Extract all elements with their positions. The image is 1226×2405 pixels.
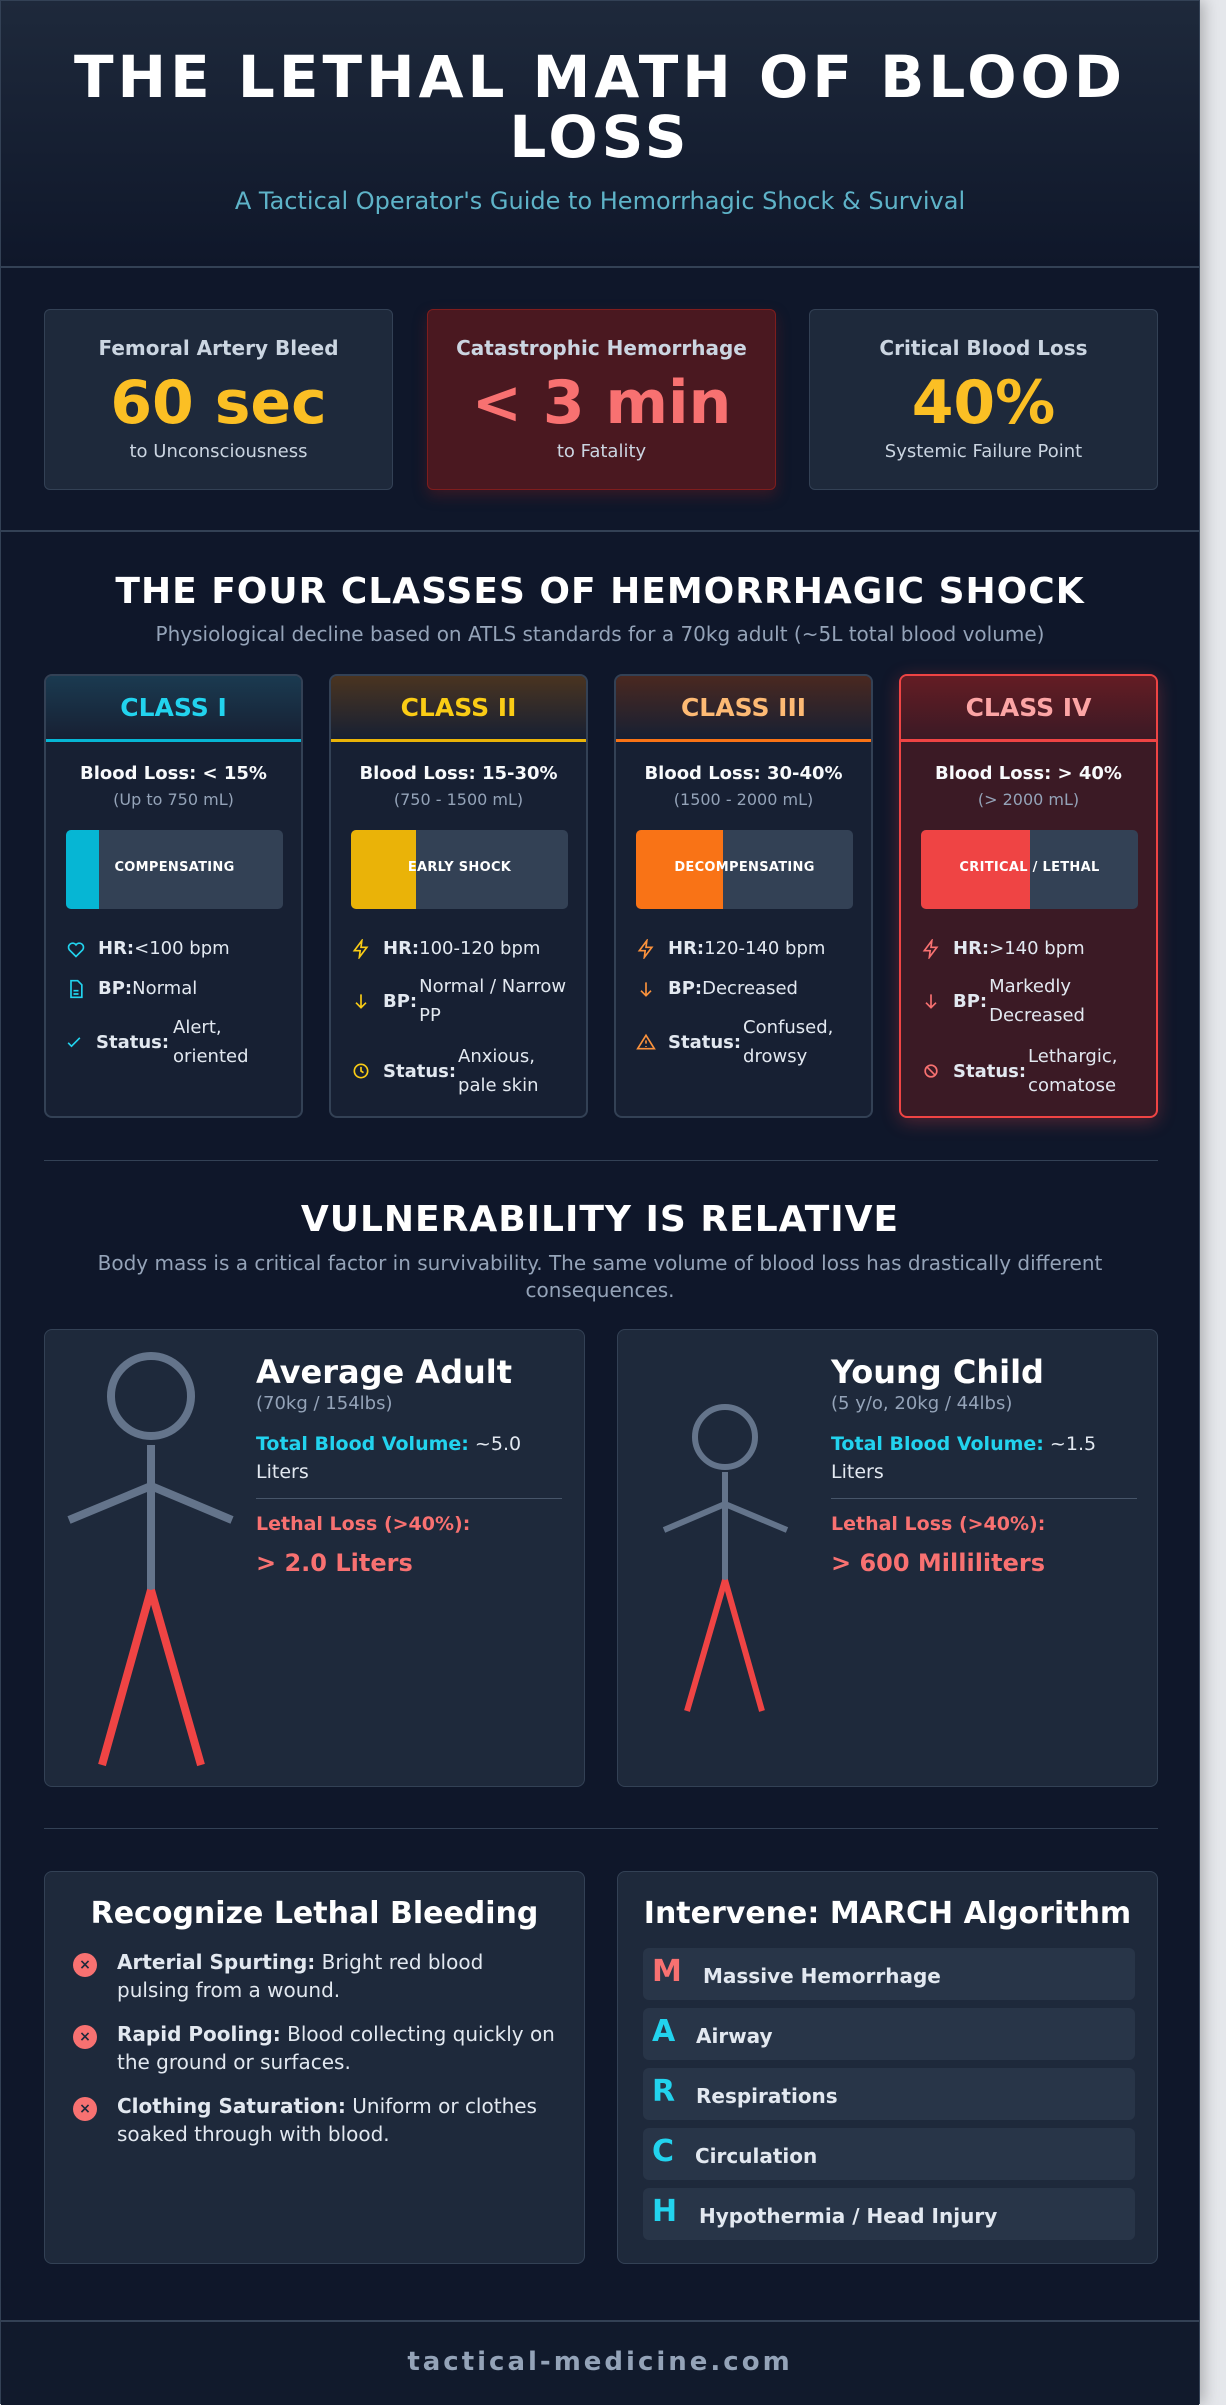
class IV card: Markedly: [989, 976, 1071, 997]
class IV card: Decreased: [989, 1005, 1085, 1026]
class IV card: (> 2000 mL): [978, 790, 1079, 809]
M: Massive Hemorrhage: [703, 1964, 941, 1988]
stat: critical: Critical Blood Loss: [879, 336, 1088, 360]
class I card: oriented: [173, 1046, 249, 1067]
class I card: COMPENSATING: [114, 860, 235, 875]
subtitle: A Tactical Operator's Guide to Hemorrhagic Shock & Survival: [235, 187, 965, 215]
section title: vulnerability: VULNERABILITY IS RELATIVE: [301, 1199, 899, 1240]
item: saturation: ×: [79, 2101, 91, 2117]
class II card: HR:: [383, 938, 419, 959]
class II card: Blood Loss: 15-30%: [359, 763, 558, 784]
class I card: CLASS I: [120, 693, 227, 722]
class IV card: CRITICAL / LETHAL: [959, 860, 1100, 875]
title: LOSS: [509, 103, 691, 171]
class III card: (1500 - 2000 mL): [674, 790, 813, 809]
adult text: > 2.0 Liters: [256, 1549, 413, 1577]
class III card: BP:: [668, 978, 702, 999]
class II card: BP:: [383, 990, 417, 1012]
class III card: Blood Loss: 30-40%: [644, 763, 843, 784]
A: [643, 2008, 1135, 2060]
class II card: [329, 674, 588, 1118]
A: A: [652, 2014, 675, 2049]
class I card: HR:: [98, 938, 134, 959]
R: Respirations: [696, 2084, 838, 2108]
title: [74, 43, 1126, 171]
R: R: [652, 2074, 675, 2109]
header: [1, 1, 1199, 268]
stat: femoral: 60 sec: [110, 368, 327, 438]
R: [643, 2068, 1135, 2120]
class I card: Status:: [96, 1032, 169, 1052]
icon: child figure: [662, 1404, 788, 1712]
class IV card: BP:: [953, 990, 987, 1012]
child text: (5 y/o, 20kg / 44lbs): [831, 1393, 1012, 1414]
section subtitle: Physiological decline based on ATLS standards for a 70kg adult (~5L total blood volume): [156, 622, 1044, 646]
item: arterial: Arterial Spurting: Bright red blood pulsing from a wound.: [117, 1950, 483, 2002]
item: pooling: ×: [79, 2029, 91, 2045]
H: Hypothermia / Head Injury: [699, 2204, 997, 2228]
class IV card: Status:: [953, 1060, 1026, 1082]
adult text: Average Adult: [256, 1353, 512, 1391]
adult text: (70kg / 154lbs): [256, 1393, 392, 1414]
adult text: Total Blood Volume: ~5.0 Liters: [256, 1433, 521, 1483]
item: arterial: ×: [79, 1957, 91, 1973]
child text: Young Child: [831, 1353, 1044, 1391]
child text: > 600 Milliliters: [831, 1549, 1045, 1577]
panel: MARCH: [617, 1871, 1158, 2264]
stat: catastrophic: < 3 min: [472, 368, 731, 438]
class IV card: Blood Loss: > 40%: [935, 763, 1122, 784]
MARCH title: Intervene: MARCH Algorithm: [644, 1896, 1131, 1931]
card: child: [617, 1329, 1158, 1787]
stat: critical: [809, 309, 1158, 490]
H: H: [652, 2194, 677, 2229]
vulnerability subtitle: Body mass is a critical factor in survivability. The same volume of blood loss has drastically different consequences.: [98, 1251, 1102, 1302]
class II card: (750 - 1500 mL): [394, 790, 523, 809]
section title: classes: THE FOUR CLASSES OF HEMORRHAGIC SHOCK: [115, 571, 1085, 612]
item: pooling: Rapid Pooling: Blood collecting quickly on the ground or surfaces.: [117, 2022, 555, 2074]
class III card: Confused,: [743, 1017, 833, 1038]
stat: critical: 40%: [912, 368, 1055, 438]
class III card: DECOMPENSATING: [674, 860, 815, 875]
class IV card: CLASS IV: [966, 693, 1091, 722]
stat: critical: Systemic Failure Point: [885, 441, 1082, 462]
class IV card: Lethargic,: [1028, 1046, 1117, 1067]
class III card: Status:: [668, 1032, 741, 1052]
class II card: 100-120 bpm: [419, 938, 540, 959]
class III card: CLASS III: [681, 693, 806, 722]
stat: femoral: Femoral Artery Bleed: [98, 336, 339, 360]
class III card: HR:: [668, 938, 704, 959]
M: M: [652, 1954, 682, 1989]
adult text: [256, 1353, 562, 1577]
class II card: Normal / Narrow: [419, 976, 566, 997]
item: saturation: Clothing Saturation: Uniform or clothes soaked through with blood.: [117, 2094, 537, 2146]
class I card: <100 bpm: [134, 938, 230, 959]
footer: tactical-medicine.com: [407, 2347, 793, 2377]
class I card: Alert,: [173, 1017, 222, 1038]
class II card: EARLY SHOCK: [408, 860, 511, 875]
class III card: 120-140 bpm: [704, 938, 825, 959]
stat: catastrophic: Catastrophic Hemorrhage: [456, 336, 747, 360]
child text: [830, 1353, 1137, 1577]
adult text: Lethal Loss (>40%):: [256, 1513, 470, 1535]
child text: Total Blood Volume: ~1.5 Liters: [831, 1433, 1096, 1483]
class I card: BP:: [98, 978, 132, 999]
class II card: pale skin: [458, 1075, 539, 1096]
class IV card: [899, 674, 1158, 1118]
class III card: Decreased: [702, 978, 798, 999]
C: Circulation: [695, 2144, 817, 2168]
class II card: Anxious,: [458, 1046, 535, 1067]
class I card: [44, 674, 303, 1118]
stat: femoral: [44, 309, 393, 490]
recognize title: Recognize Lethal Bleeding: [91, 1896, 538, 1931]
class IV card: HR:: [953, 938, 989, 959]
class I card: Normal: [132, 978, 197, 999]
footer: [1, 2320, 1199, 2405]
child text: Lethal Loss (>40%):: [831, 1513, 1045, 1535]
M: [643, 1948, 1135, 2000]
class I card: Blood Loss: < 15%: [80, 763, 267, 784]
class II card: PP: [419, 1005, 441, 1026]
C: C: [652, 2134, 674, 2169]
stat: catastrophic: to Fatality: [557, 441, 646, 462]
class II card: Status:: [383, 1060, 456, 1082]
stats row: [1, 268, 1199, 532]
card: adult: [44, 1329, 585, 1787]
class I card: (Up to 750 mL): [113, 790, 234, 809]
stat: catastrophic: [427, 309, 776, 490]
class III card: drowsy: [743, 1046, 807, 1067]
stat: femoral: to Unconsciousness: [129, 441, 308, 462]
class III card: [614, 674, 873, 1118]
C: [643, 2128, 1135, 2180]
class IV card: comatose: [1028, 1075, 1116, 1096]
class IV card: >140 bpm: [989, 938, 1085, 959]
class II card: CLASS II: [401, 693, 516, 722]
panel: recognize: [44, 1871, 585, 2264]
A: Airway: [696, 2024, 773, 2048]
title: THE LETHAL MATH OF BLOOD: [74, 43, 1126, 111]
H: [643, 2188, 1135, 2240]
icon: adult figure: [68, 1352, 234, 1766]
